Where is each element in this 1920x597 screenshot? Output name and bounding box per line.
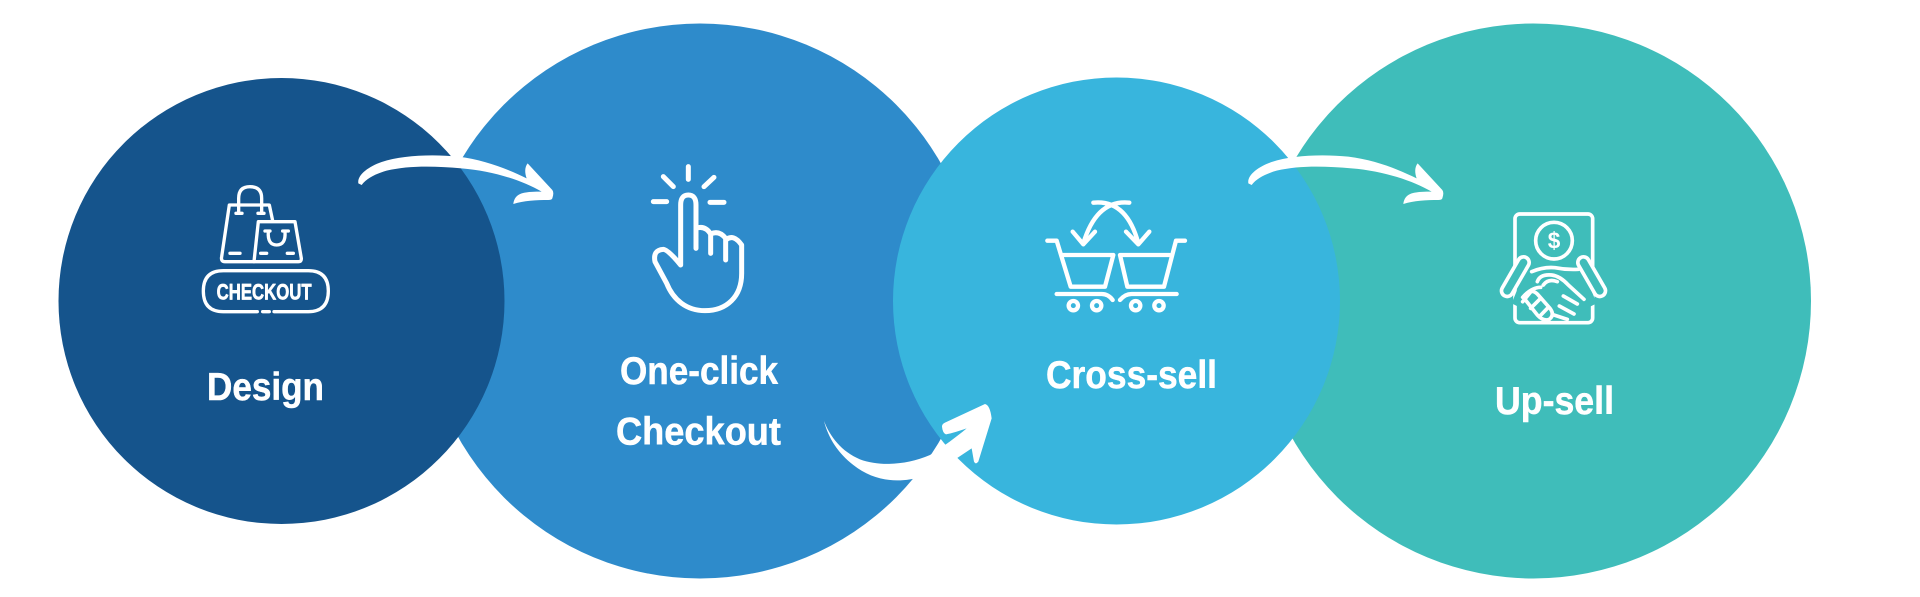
icon: two carts with swap arrows xyxy=(1047,202,1185,310)
arrow: one-click to cross-sell xyxy=(824,404,992,480)
panel: one-click checkout xyxy=(422,24,978,578)
icon: tapping hand xyxy=(653,167,742,311)
icon: shopping bags and checkout button: CHECKOUT xyxy=(217,279,312,304)
icon: handshake and dollar contract: $ xyxy=(1548,228,1561,254)
label: One-click: One-click xyxy=(620,350,778,393)
panel: design xyxy=(58,78,504,524)
label: Checkout: Checkout xyxy=(616,410,781,454)
icon: shopping bags and checkout button xyxy=(203,187,328,312)
arrow: design to one-click xyxy=(358,155,553,204)
icon: handshake and dollar contract xyxy=(1499,214,1608,323)
label: Cross-sell: Cross-sell xyxy=(1046,354,1217,397)
label: Design: Design xyxy=(207,366,324,409)
label: Up-sell: Up-sell xyxy=(1495,380,1614,423)
arrow: cross-sell to up-sell xyxy=(1248,155,1443,204)
panel: up-sell xyxy=(1256,24,1811,578)
panel: cross-sell xyxy=(893,78,1340,524)
